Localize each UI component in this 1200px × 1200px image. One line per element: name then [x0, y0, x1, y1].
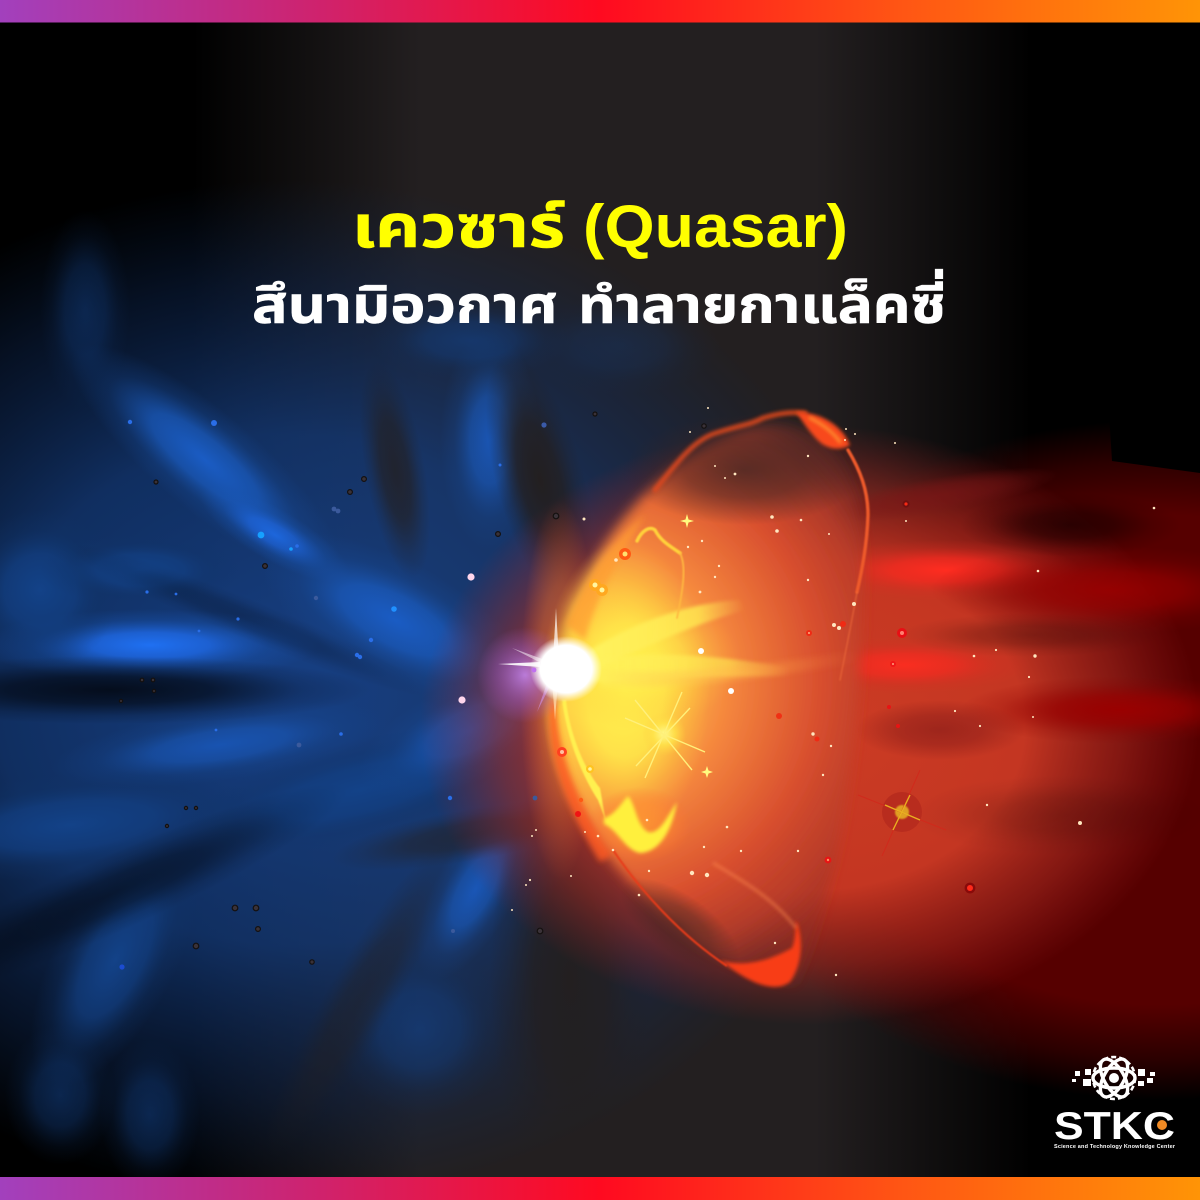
icon: atom: [1072, 1055, 1155, 1101]
wordmark: STKC: [1054, 1105, 1175, 1148]
title: [352, 193, 848, 260]
blue stars: [119, 420, 547, 970]
top gradient bar: [0, 0, 1200, 22]
warm stars: [511, 407, 1155, 976]
logo tagline: Science and Technology Knowledge Center: [1054, 1144, 1176, 1150]
red and yellow glowing stars: [557, 500, 975, 893]
subtitle: ทำลายกาแล็คซี่: [578, 269, 946, 335]
title: เควซาร์: [352, 193, 565, 260]
subtitle: สึนามิอวกาศ: [252, 277, 558, 335]
sparkle: red star: [858, 770, 946, 856]
title: (Quasar): [583, 193, 848, 260]
blue nebula: [0, 180, 880, 1200]
bright core: [477, 608, 602, 723]
left rim: [549, 700, 612, 862]
sparkle: small stars: [680, 514, 713, 778]
lower yellow flame: [588, 787, 692, 863]
subtitle: [252, 269, 946, 335]
dark streaks: [0, 343, 650, 1200]
logo dot: [1157, 1120, 1167, 1130]
hot yellow core: [540, 540, 710, 840]
dark stars: [119, 412, 706, 964]
red plume: [420, 395, 1200, 1100]
inner yellow filament: [637, 528, 684, 618]
bottom gradient bar: [0, 1177, 1200, 1200]
lower filament: [613, 850, 801, 987]
logo: STKC: [1054, 1055, 1176, 1150]
sparkle: yellow star: [625, 692, 705, 778]
fire shell: [520, 415, 865, 990]
upper filament: [655, 412, 868, 680]
black corner patch: [1108, 395, 1200, 473]
